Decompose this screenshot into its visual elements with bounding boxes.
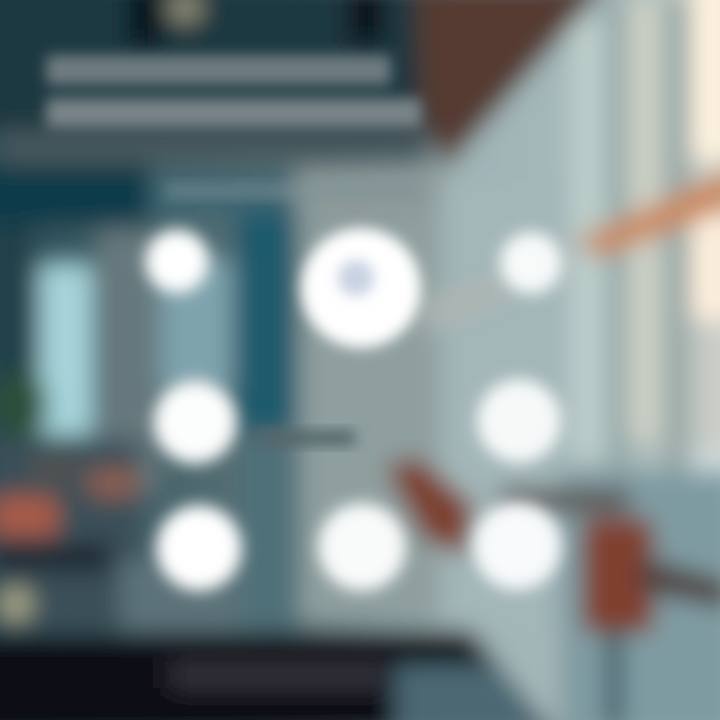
circle node: middle left [153,380,237,464]
centre icon [338,260,374,296]
orange sunlight beam [575,165,720,258]
teal strip under title [0,165,150,225]
lower left floor [0,440,140,630]
bright window [40,265,92,435]
left dark column [0,225,32,435]
circle node: bottom right [473,502,561,590]
diagonal light rail [420,272,510,332]
brown ceiling wedge [415,0,610,170]
circle node: top left [145,229,209,293]
central grey wall [300,220,440,620]
dark footer band [0,630,560,720]
title block [46,55,422,128]
title line 1 [46,55,391,85]
right vertical window mullions [570,20,606,460]
dark ceiling beams [130,0,162,46]
light teal panel [160,260,232,390]
title line 2 [46,98,422,128]
small lamp bottom left [0,587,33,621]
circle node: bottom left [156,505,242,591]
orange furniture left [0,496,58,536]
teal central column [235,212,297,432]
circle node: bottom centre [318,503,406,591]
circle node: top centre (large) [301,228,421,348]
circle node: middle right [477,379,561,463]
brown chairs right [385,458,474,556]
ceiling band [0,0,440,130]
circle node: top right [500,232,562,294]
ceiling lamp [167,0,203,23]
subtitle line [165,183,420,199]
grey column [98,230,158,490]
centre caption [255,430,355,446]
plant [0,371,48,439]
